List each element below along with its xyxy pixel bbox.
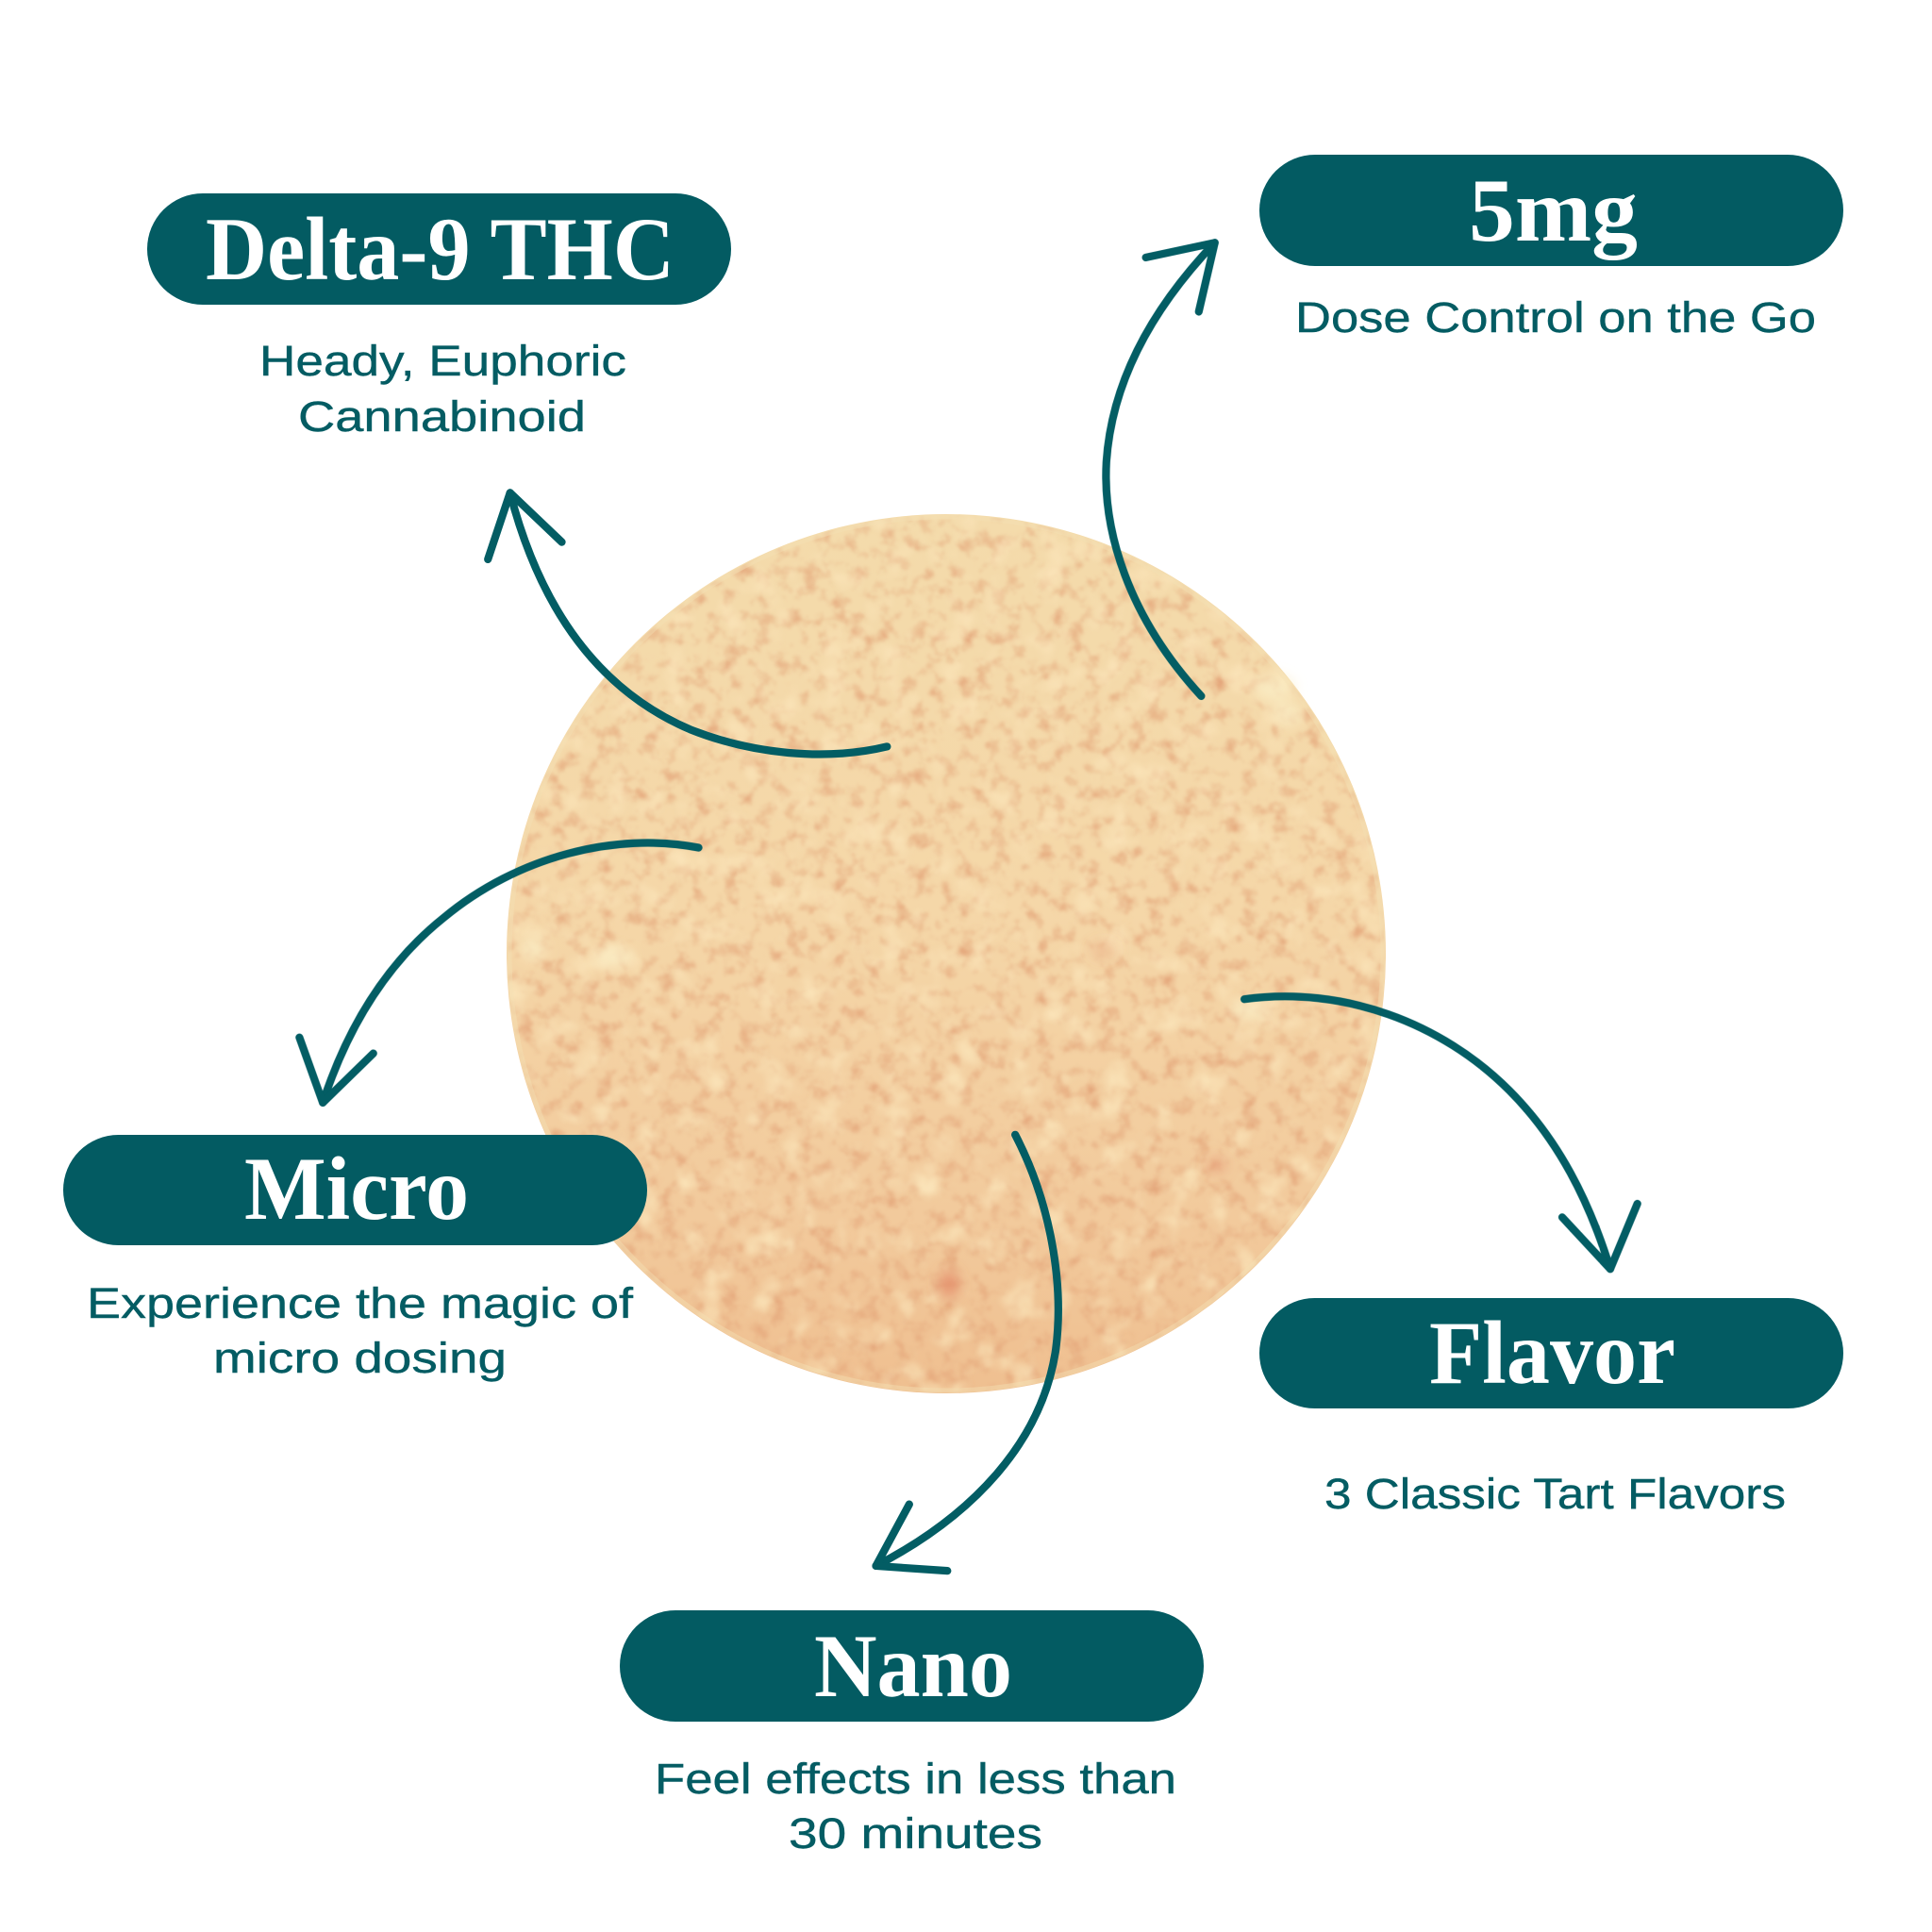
- pill heading: 5mg: [1259, 155, 1843, 266]
- pill heading: 5mg: 5mg: [1469, 160, 1638, 260]
- arrow: to Nano: [876, 1135, 1058, 1571]
- pill heading: Nano: Nano: [814, 1616, 1012, 1716]
- pill heading: Nano: [620, 1610, 1204, 1722]
- description: Micro: Experience the magic of: [87, 1279, 633, 1327]
- description: Nano: [655, 1755, 1176, 1857]
- description: 5mg: Dose Control on the Go: [1295, 293, 1816, 341]
- pill heading: Delta-9 THC: Delta-9 THC: [206, 199, 675, 299]
- arrow: to Micro: [299, 842, 699, 1103]
- callout: Flavor: [1259, 1298, 1843, 1518]
- pill heading: Flavor: [1259, 1298, 1843, 1408]
- description: Delta-9 THC: Heady, Euphoric: [259, 337, 626, 385]
- description: Delta-9 THC: Cannabinoid: [298, 392, 586, 441]
- tablet image: [507, 514, 1386, 1393]
- description: Delta-9 THC: [259, 337, 626, 441]
- description: Flavor: 3 Classic Tart Flavors: [1324, 1470, 1786, 1518]
- pill heading: Micro: [63, 1135, 647, 1245]
- callout: Micro: [63, 1135, 647, 1382]
- arrow: to 5mg: [1106, 242, 1215, 696]
- callout: Nano: [620, 1610, 1204, 1857]
- callout: 5mg: [1259, 155, 1843, 341]
- description: Micro: [87, 1279, 633, 1382]
- description: Micro: micro dosing: [213, 1334, 507, 1382]
- arrow: to Delta-9 THC: [488, 492, 887, 754]
- description: Nano: 30 minutes: [789, 1809, 1042, 1857]
- pill heading: Micro: Micro: [244, 1139, 469, 1239]
- description: Nano: Feel effects in less than: [655, 1755, 1176, 1803]
- pill heading: Flavor: Flavor: [1429, 1303, 1675, 1403]
- arrow: to Flavor: [1244, 996, 1638, 1269]
- callout: Delta-9 THC: [147, 193, 731, 441]
